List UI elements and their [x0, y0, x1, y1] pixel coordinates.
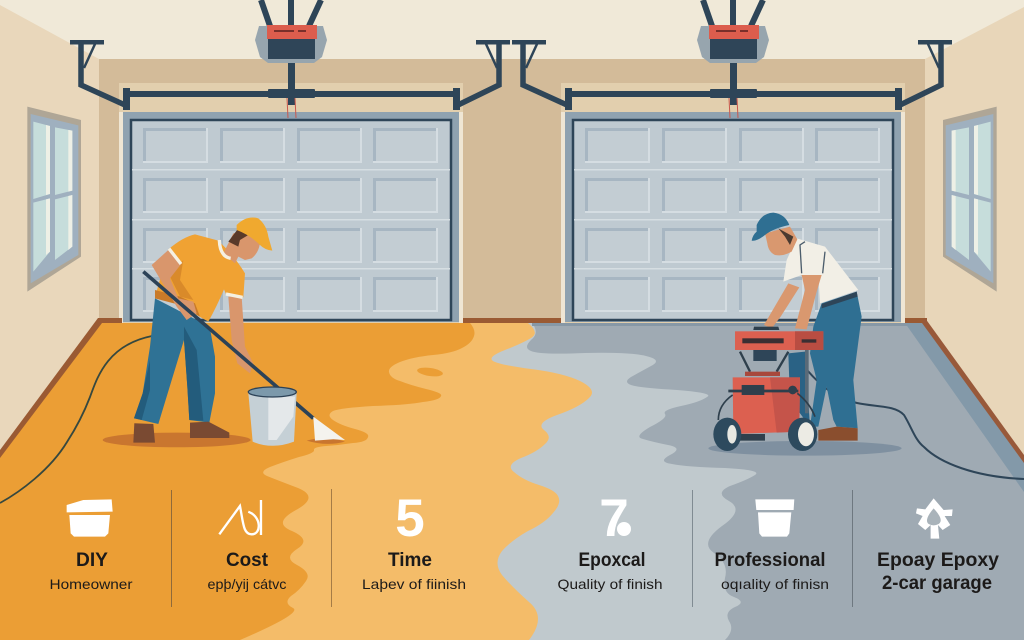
- label: professional subtext: oqıality of finisn: [721, 576, 829, 592]
- baseboards: [98, 318, 927, 324]
- icon: numeral 5: 5: [395, 489, 425, 548]
- column: Epoxcal: [558, 489, 662, 592]
- column: Epoay Epoxy: [877, 498, 999, 594]
- floor: orange spot: [417, 366, 443, 378]
- garage door: right: [561, 112, 905, 323]
- floor: pale orange wet coat: [240, 323, 1024, 640]
- heading: Professional: Professional: [714, 550, 826, 571]
- floor: dark grey professional coat: [527, 323, 1024, 640]
- floor: top edge shadow grey: [532, 323, 907, 326]
- icon: cost glyph: [219, 500, 261, 535]
- heading: DIY: DIY: [76, 550, 108, 571]
- garage door: left: [119, 112, 463, 323]
- ceiling: [0, 0, 1024, 330]
- icon: DIY bucket: [67, 499, 113, 537]
- hose: right: [807, 370, 1024, 479]
- floor: light grey coat: [492, 323, 1024, 640]
- label: cost subtext: epþ/yij cátvc: [208, 576, 286, 592]
- heading: Epoay Epoxy: Epoay Epoxy: [877, 550, 999, 571]
- door track and opener: right: [512, 0, 952, 118]
- window: right wall: [943, 107, 997, 292]
- back wall: [99, 59, 925, 324]
- stats strip: [50, 489, 999, 607]
- right wall: [925, 7, 1024, 458]
- floor: right wall edge strip: [905, 323, 1024, 492]
- icon: professional bucket: [755, 499, 794, 537]
- column: Cost: [208, 500, 286, 592]
- floor: orange DIY coat: [0, 323, 1024, 640]
- left baseboard diagonal: [0, 318, 102, 458]
- worker: DIY homeowner with roller: [103, 217, 345, 447]
- worker: professional with epoxy machine: [708, 213, 902, 456]
- label: Quality of finish: Quality of finish: [558, 576, 662, 592]
- icon: numeral 7 with dot: 7: [599, 489, 629, 548]
- left wall: [0, 5, 99, 455]
- column: Professional: [714, 499, 829, 592]
- column: Time: [362, 489, 466, 592]
- heading: Cost: Cost: [226, 550, 269, 571]
- label: Homeowner: Homeowner: [50, 576, 133, 592]
- heading: 2-car garage: 2-car garage: [882, 573, 992, 594]
- heading: Time: Time: [388, 550, 432, 571]
- window: left wall: [27, 107, 81, 292]
- right baseboard diagonal: [922, 318, 1024, 463]
- column: DIY: [50, 499, 133, 592]
- door track and opener: left: [70, 0, 510, 118]
- heading: Epoxcal: Epoxcal: [578, 550, 646, 571]
- hose: left: [0, 336, 152, 503]
- icon: flower-shaped fixture: [916, 498, 953, 539]
- label: time subtext: Laþev of fiinish: [362, 576, 466, 592]
